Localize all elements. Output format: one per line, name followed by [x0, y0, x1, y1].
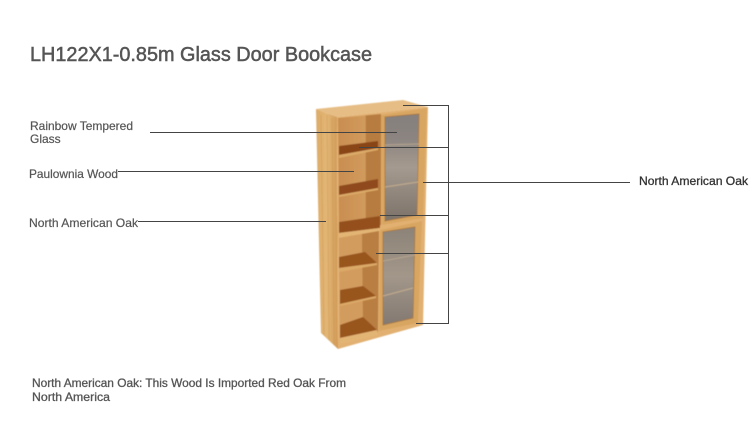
label: rainbow tempered glass: Rainbow Tempered	[30, 119, 133, 133]
upper glass door	[381, 108, 427, 225]
label: rainbow tempered glass: Glass	[30, 132, 61, 146]
lower glass door	[379, 221, 422, 331]
leader lines	[118, 106, 630, 324]
front frame	[337, 107, 428, 349]
side panel	[316, 109, 338, 349]
label: paulownia wood: Paulownia Wood	[29, 167, 118, 181]
title: LH122X1-0.85m Glass Door Bookcase	[30, 44, 372, 66]
label: north american oak right: North American Oak	[639, 174, 749, 188]
upper shelves back	[338, 114, 381, 232]
label: north american oak left: North American Oak	[29, 216, 139, 230]
top face	[316, 100, 428, 117]
lower shelves back	[339, 231, 379, 344]
bookcase illustration	[316, 100, 428, 349]
upper shelves	[339, 141, 378, 155]
footnote: North America	[32, 390, 110, 404]
lower shelves	[339, 252, 377, 268]
footnote: North American Oak: This Wood Is Imported Red Oak From	[32, 376, 346, 390]
side grain	[321, 115, 334, 345]
